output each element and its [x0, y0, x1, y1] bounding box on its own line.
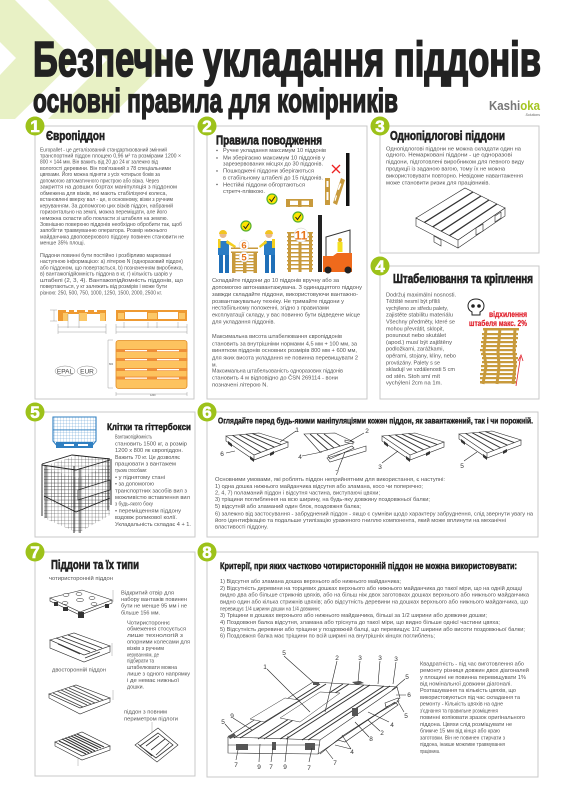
panel 5: Клітки та гіттербокси [26, 402, 195, 537]
diagram: pallet exploded drawing: 3 [378, 655, 382, 662]
text block: працювати з вантажем [115, 462, 176, 468]
text block: 1200 x 800 як європіддон. [115, 448, 183, 454]
logo: Kashioka: .Solutions [525, 113, 540, 117]
text block: manual stacking: Складайте піддони до 10 піддонів вручну або за [212, 277, 340, 284]
text block: Dodržuj maximální nosnosti. [386, 292, 456, 298]
text block: maximum height: становить 4 м відповідно до ČSN 269114 - вони [212, 375, 338, 382]
text block: squareness and nails: у площині не повинна перевищувати 1% [420, 675, 526, 681]
diagram: pallet exploded drawing: 4 [390, 722, 394, 729]
bullet list: Нестійкі піддони обгортаються [223, 181, 305, 188]
text block: squareness and nails: від номінальної довжини діагоналі. [420, 682, 512, 688]
text block: продукції із заданою вагою, тому їх не можна [386, 166, 506, 172]
text block: 1) одна дошка нижнього майданчика відсутня або зламана, косо чи поперечно; [215, 483, 423, 490]
text block: maximum height: м. [212, 362, 217, 368]
text block: manual stacking: допомогою автонавантажувача. З одинадцятого піддону [212, 285, 362, 291]
text block: Těžiště nesmí být příliš [386, 299, 440, 305]
text block: maximum height: Максимальна штабельованість одноразових піддонів [212, 369, 343, 375]
text block [386, 292, 456, 387]
text block: використовувати повторно. Невідоме навантаження [386, 174, 523, 180]
text block: criteria list: видно один або кілька стрижнів цвяхів; або відсутність деревини на дошках верхнього або нижнього майданчика, що [220, 598, 528, 606]
text block: four-way limits: дошки. [127, 684, 144, 690]
text block: four-way limits: лише з одного напрямку [127, 672, 190, 678]
text block: • у піднятому стані [115, 475, 165, 481]
diagram: pallet exploded drawing [221, 650, 411, 772]
icon: check marks [241, 194, 303, 231]
text block: four-way limits: обмеження стосується [127, 627, 186, 633]
text block: description: Зовнішню поверхню піддонів необхідно обробити так, щоб [40, 222, 182, 228]
text block: markings: повертаються, у кг залежить від розмірів і може бути [40, 284, 167, 290]
text block: squareness and nails: Розташування та кількість цвяхів, що [420, 688, 516, 694]
text block: manual stacking: експлуатації складу, у вас повинно бути відведене місце [212, 312, 360, 318]
text block: description: майданчика двоповерхового піддону повинен становити не [40, 233, 184, 240]
text block: provázány. Palety s se [386, 360, 440, 366]
text block: squareness and nails: повинні копіювати зразок оригінального [420, 715, 525, 721]
text block: markings: або піддоном, що повертається, b) позначенням виробника, [40, 265, 183, 271]
bullet list: Ми зберігаємо максимум 10 піддонів у [223, 156, 325, 162]
text block: становить 1500 кг, а розмір [115, 441, 187, 447]
badge 4 [370, 256, 390, 276]
text block: Вантажопідйомність [115, 434, 152, 441]
illustration: pallet stack of 11: 11 [295, 228, 308, 242]
text block: maximum height: Максимальна висота штабелювання європіддонів [212, 334, 342, 340]
text block: транспортних засобів вил з [115, 488, 187, 494]
warning label: штабеля макс. 2% [469, 319, 527, 328]
illustration: pallet stack of 6: 5 [241, 252, 247, 264]
badge 5 [26, 402, 44, 422]
text block: opěrami, stojany, klíny, nebo [386, 354, 456, 360]
text block: opening [121, 589, 187, 616]
diagram: pallet exploded drawing: 3 [358, 655, 362, 662]
text block: squareness and nails: ремонту різниця довжин двох діагоналей [420, 667, 529, 674]
illustration: pallet 2 broken with labels: 4 [298, 454, 302, 461]
text block: manual stacking: розвантажувальну техніку. Не тримайте піддони у [212, 298, 344, 305]
bullet list: в стабільному штабелі до 15 піддонів. [223, 175, 323, 181]
text block: description: менше 35% площі. [40, 241, 85, 247]
text block: maximum height: позначені літерою N. [212, 382, 268, 388]
text block: podložkami, zarážkami, [386, 347, 444, 353]
illustration: grid pallet [55, 732, 110, 766]
panel 3: Однопідлогові піддони [370, 116, 539, 253]
text block [215, 476, 534, 531]
text block: four-way limits: опорними колесами для [127, 640, 190, 646]
badge 1 [26, 116, 44, 136]
diagram: pallet exploded drawing: 7 [307, 765, 311, 772]
panel 8: criteria [198, 542, 538, 777]
label: perimeter pallet: периметром підлоги [124, 716, 178, 722]
subtitle: основні правила для комірників [33, 82, 398, 119]
text block: markings: штабелі (2, 3, 4). Вантажопідйомність піддонів, що [40, 277, 183, 284]
badge 2 [198, 116, 216, 136]
text block: squareness and nails: з'єднання та правильне розміщення [420, 708, 498, 714]
heading: Піддони та їх типи: Піддони та їх типи [51, 558, 139, 572]
text block: four-way limits: керуванням, де [127, 652, 159, 658]
illustration: pallet 4 with label 5: 5 [460, 463, 464, 470]
illustration: two-way pallet [50, 633, 112, 662]
illustration: pallet 1 with labels 1 and 6: 1 [295, 427, 299, 434]
text block: markings: Піддони повинні бути постійно і розбірливо марковані [40, 252, 171, 259]
text block: mohou převrátit, sklopit, [386, 326, 444, 332]
text block: 5) відсутній або зламаний один блок, поздовжня балка; [215, 503, 361, 510]
heading: Штабелювання та кріплення: Штабелювання та кріплення [393, 272, 533, 286]
text block: вздовж роликової колії. [115, 515, 177, 521]
illustration: pallet 2 broken with labels [298, 428, 369, 477]
background chevrons [0, 0, 168, 119]
text block: 2, 4, 7) поламаний піддон і відсутня частина, виступаючі цвяхи; [215, 490, 380, 497]
diagram: pallet exploded drawing: 6 [407, 692, 411, 699]
text block: 3) тріщини поглиблення на всю ширину, на будь-яку довжину поздовжньої балки; [215, 497, 430, 503]
diagram: pallet exploded drawing: 8 [369, 736, 373, 743]
text block: four-way limits: лише технологій з [127, 632, 184, 639]
illustration: pallet 2 broken with labels: 7 [335, 470, 339, 477]
text block: description: керуванням. За допомогою цих візків піддон, набраний [40, 202, 173, 209]
badge 6 [198, 402, 216, 422]
text block: manual stacking: завжди складайте піддони, використовуючи вантажно- [212, 291, 358, 298]
illustration: right worker [259, 230, 275, 273]
illustration: pallet 4 with label 5 [459, 431, 521, 470]
text block: squareness and nails: піддона, інакше можливе травмування [420, 742, 505, 748]
illustration: pallet 3 with label 3: 3 [378, 464, 382, 471]
badge 2: 2 [202, 117, 212, 136]
illustration: plastic pallet [50, 590, 113, 618]
text block: criteria list: перевищує 1/4 ширини дошки на 1/4 довжини; [220, 606, 320, 612]
text block: manual stacking: нестабільному положенні, згідно з правилами [212, 306, 329, 312]
icon: black wall pole [346, 153, 350, 206]
text block: з будь-якого боку [115, 502, 153, 508]
drawing: pallet front view [116, 310, 187, 334]
text block: description: неможна скласти або покласти зі штабеля на землю. [40, 216, 168, 222]
text block: description: закриття на довших бортах маніпуляція з піддоном [40, 185, 177, 191]
text block: трьома способами: [115, 468, 147, 474]
icon: skull [468, 299, 484, 315]
illustration: pallet 2 broken with labels: 2 [365, 428, 369, 435]
icon: upright and leaning pallets [325, 178, 345, 205]
text block: властивості піддону. [215, 525, 268, 531]
text block: criteria list: 1) Відсутня або зламана дошка верхнього або нижнього майданчика; [220, 578, 401, 585]
text block: four-way limits: Чотиристороннє [127, 620, 170, 626]
drawing: pallet top view: 1200 [150, 394, 156, 397]
text block: skladují ve vzdálenosti 5 cm [386, 367, 455, 373]
diagram: pallet exploded drawing: 1 [263, 664, 267, 671]
text block: four-way limits [127, 620, 190, 690]
drawing: pallet top view: 800 [109, 363, 114, 366]
bullet list: стретч-плівкою. [223, 189, 265, 195]
text block: criteria list: 2) Відсутність деревини на торцевих дошках верхнього або нижнього майданчика до такої міри, що на одній дощці [220, 585, 522, 592]
text block: Важить 70 кг. Це дозволяє [115, 455, 180, 461]
text block: markings: в) вантажопідйомність піддона в кг, г) кількість шарів у [40, 271, 172, 278]
text block: maximum height: становить за внутрішніми нормами 4,5 мм + 100 мм, за [212, 341, 358, 347]
panel 2: Правила поводження [198, 116, 367, 399]
badge 3: 3 [375, 117, 385, 136]
text block: opening: бути не менше 95 мм і не [121, 604, 187, 610]
text block: description: встановлені вверху вал - це, в основному, візки з ручним [40, 197, 173, 203]
text block: одного. Немарковані піддони - це одноразові [386, 153, 512, 159]
text block: description: 800 × 144 мм. Він важить від 20 до 24 кг залежно від [40, 160, 159, 166]
diagram: pallet exploded drawing: 5 [404, 713, 408, 720]
bullet list: Ручне укладання максимум 10 піддонів [223, 148, 326, 154]
bullet list: зарезервованих місцях до 30 піддонів. [223, 162, 323, 168]
badge 4: 4 [375, 257, 385, 276]
text block: criteria list: видно два або більше стрижнів цвяхів, або на більш ніж двох заготовках дошках верхнього або нижнього майданчика [220, 592, 530, 599]
logos: EPAL and EUR: EUR [80, 368, 94, 376]
illustration: two-deck pallet [49, 685, 113, 714]
text block: Укладальність складає 4 + 1. [115, 522, 191, 528]
text block: description [40, 146, 184, 247]
logos: EPAL and EUR [55, 366, 97, 376]
text block: можливістю вставлення вил [115, 495, 190, 501]
heading: criteria: Критерії, при яких частково чотиристоронній піддон не можна використовувати: [220, 561, 517, 571]
logo: Kashioka: Kashioka [489, 98, 541, 113]
text block: maximum height: для яких висота укладання не повинна перевищувати 2 [212, 355, 358, 361]
text block: Všechny předměty, které se [386, 320, 455, 326]
bullet list: Пошкоджені піддони зберігаються [223, 169, 314, 175]
text block: maximum height: винятком піддонів основних розмірів 800 мм + 600 мм, [212, 348, 357, 354]
diagram: pallet exploded drawing: 7 [234, 762, 238, 769]
text block: може становити ризик для працівників. [386, 180, 490, 186]
text block: manual stacking [212, 277, 362, 326]
diagram: pallet exploded drawing: 2 [380, 730, 384, 737]
text block: vychýleno ze středu palety, [386, 306, 448, 312]
warning label [469, 310, 527, 328]
heading: Правила поводження: Правила поводження [216, 134, 322, 148]
text block: markings: різною: 250, 500, 750, 1000, 1250, 1500, 2000, 2500 кг. [40, 290, 162, 296]
label: two-deck pallet: двосторонній піддон [52, 667, 106, 674]
illustration: pallet 1 with labels 1 and 6 [220, 427, 299, 462]
text block: description: цвяхами. Його можна підняти з усіх чотирьох боків за [40, 170, 161, 178]
diagram: pallet exploded drawing: 5 [282, 650, 286, 657]
badge 7 [26, 542, 44, 562]
text block: four-way limits: підбирати та [127, 659, 155, 665]
text block: description: Europallet - це деталізований стандартизований змінний [40, 146, 167, 153]
text block: criteria list [220, 578, 530, 640]
panel 4: Штабелювання та кріплення [370, 256, 539, 399]
illustration: wire cage [42, 455, 111, 533]
text block: squareness and nails: заготовки. Він не повинен стирчати з [420, 735, 505, 741]
bullet list [216, 148, 326, 195]
text block: markings [40, 252, 183, 296]
heading: Європіддон: Європіддон [46, 128, 105, 143]
diagram: pallet exploded drawing: 3 [394, 656, 398, 663]
text block: posunout nebo skutálet [386, 333, 446, 339]
drawing: pallet top view [108, 340, 188, 397]
text block: criteria list: 5) Відсутність деревини або тріщини у поздовжній балці, що перевищує 1/2 ширини або висоти поздовжньої балки; [220, 626, 525, 633]
text block [386, 146, 524, 186]
label: perimeter pallet: піддон з повним [124, 710, 167, 716]
text block: opening: більше 156 мм. [121, 610, 160, 616]
illustration: pallet 1 with labels 1 and 6: 6 [220, 451, 224, 458]
illustration: pallet stack of 6: 6 [241, 240, 247, 252]
diagram: pallet exploded drawing: 4 [350, 749, 354, 756]
text block: criteria list: 3) Тріщини в дошках верхнього або нижнього майданчика, більші за 1/2 ширини або довжини дошки; [220, 612, 487, 619]
diagram: pallet exploded drawing: 9 [230, 713, 234, 720]
diagram: pallet exploded drawing: 7 [333, 760, 337, 767]
text block: squareness and nails [420, 661, 529, 755]
diagram: pallet exploded drawing: 9 [257, 764, 261, 771]
icon: flat pallet [286, 199, 313, 207]
panel 7: Піддони та їх типи [26, 542, 195, 776]
badge 5: 5 [30, 403, 40, 422]
diagram: pallet exploded drawing: 7 [269, 764, 273, 771]
icon: red cross [332, 165, 340, 173]
diagram: pallet exploded drawing: 5 [405, 674, 409, 681]
text block: description: транспортний піддон площею 0,96 м² та розмірами 1200 × [40, 152, 181, 160]
badge 7: 7 [30, 543, 40, 562]
text block: opening: Відкритий отвір для [121, 589, 174, 596]
badge 8 [198, 542, 216, 562]
text block: • за допомогою [115, 482, 154, 488]
text block: manual stacking: для укладання піддонів. [212, 320, 275, 326]
text block: description: запобігти травмуванню оператора. Розмір нижнього [40, 228, 167, 234]
illustration: pallet stack of 11 [287, 228, 313, 272]
text block: Однопідлогові піддони не можна складати один на [386, 146, 522, 152]
text block: Основними умовами, які роблять піддон неприйнятним для використання, є наступні: [215, 476, 445, 483]
label: four-way pallet: чотиристоронній піддон [49, 575, 113, 582]
illustration: perimeter-base pallet [135, 722, 178, 762]
text block: squareness and nails: Квадратність - під час виготовлення або [420, 661, 524, 667]
text block: піддони, підготовлені виробником для певного виду [386, 160, 524, 166]
text block: vychýlení 2cm na 1m. [386, 381, 442, 387]
text block: description: вологості деревини. Він пов'язаний з 78 спеціальними [40, 165, 171, 172]
text block: maximum height [212, 334, 358, 388]
drawing: pallet side view [50, 310, 106, 334]
text block: markings: наступною інформацією: а) літерою N (одноразовий піддон) [40, 258, 183, 265]
diagram: pallet exploded drawing: 2 [335, 655, 339, 662]
illustration: left worker [218, 230, 236, 273]
heading: Однопідлогові піддони: Однопідлогові піддони [390, 129, 505, 143]
text block: four-way limits: штабелювати можна [127, 665, 178, 671]
text block: description: допомогою автоматичного пристрою або візка. Через [40, 178, 159, 184]
text block: four-way limits: візків з ручним [127, 646, 164, 652]
text block: od stěn. Stoh smí mít [386, 374, 440, 380]
text block: squareness and nails: ремонту - Кількість цвяхів на одне [420, 702, 503, 708]
arrow: lean direction [516, 355, 523, 386]
text block: squareness and nails: ближче 15 мм від кінця або краю [420, 729, 500, 735]
text block: squareness and nails: піддона. Цвяхи слід розміщувати не [420, 722, 512, 728]
logos: EPAL and EUR: EPAL [57, 368, 73, 376]
badge 3 [370, 116, 390, 136]
text block: squareness and nails: використовуються під час складання та [420, 695, 521, 701]
illustration: pallet 3 with label 3 [378, 433, 444, 471]
panel 6: inspection [198, 402, 538, 537]
text block: criteria list: 4) Поздовжня балка відсутня, зламана або тріснута до такої міри, що видно більше однієї частини цвяха; [220, 620, 500, 626]
text block: description: обмежена для візків, які мають стабілізуючі колеса, [40, 191, 167, 197]
panel 1: Європіддон [26, 116, 194, 399]
illustration: forklift [318, 215, 352, 274]
text block: (apod.) musí být zajištěny [386, 340, 452, 346]
heading: Клітки та гіттербокси: Клітки та гіттербокси [107, 422, 191, 433]
badge 8: 8 [202, 543, 212, 562]
diagram: pallet exploded drawing: 5 [221, 719, 225, 726]
illustration: single-deck pallet [416, 188, 505, 248]
text block: criteria list: 6) Поздовжня балка має тріщини по всій ширині на внутрішніх кінцях поглиблень; [220, 633, 435, 640]
badge 6: 6 [202, 403, 212, 422]
badge 1: 1 [30, 117, 40, 136]
illustration: pallet stack of 6 [231, 240, 258, 273]
illustration: leaning stack [480, 328, 519, 384]
text block: squareness and nails: працівника. [420, 749, 440, 755]
text block: opening: набору вантажів повинен [121, 597, 187, 603]
text block: description: горизонтально на землі, можна переміщати, але його [40, 208, 167, 216]
warning label: відхилення [489, 310, 527, 319]
label: perimeter pallet [124, 710, 178, 722]
text block: zajistěte stabilitu materiálu [386, 313, 453, 319]
text block: 6) залежно від застосування - забруднений піддон - якщо є сумніви щодо характеру забруднення, слід звернути увагу на [215, 510, 534, 517]
text block: • переміщенням піддону [115, 508, 181, 514]
diagram: pallet exploded drawing: 9 [283, 764, 287, 771]
text block: four-way limits: і де немає нижньої [127, 678, 179, 684]
text block [115, 434, 191, 528]
text block: його ідентифікацію та подальше утилізацію ураженого гниллю компонента, який може вплинути на механічні [215, 517, 506, 524]
illustration: blue cage [53, 417, 96, 448]
